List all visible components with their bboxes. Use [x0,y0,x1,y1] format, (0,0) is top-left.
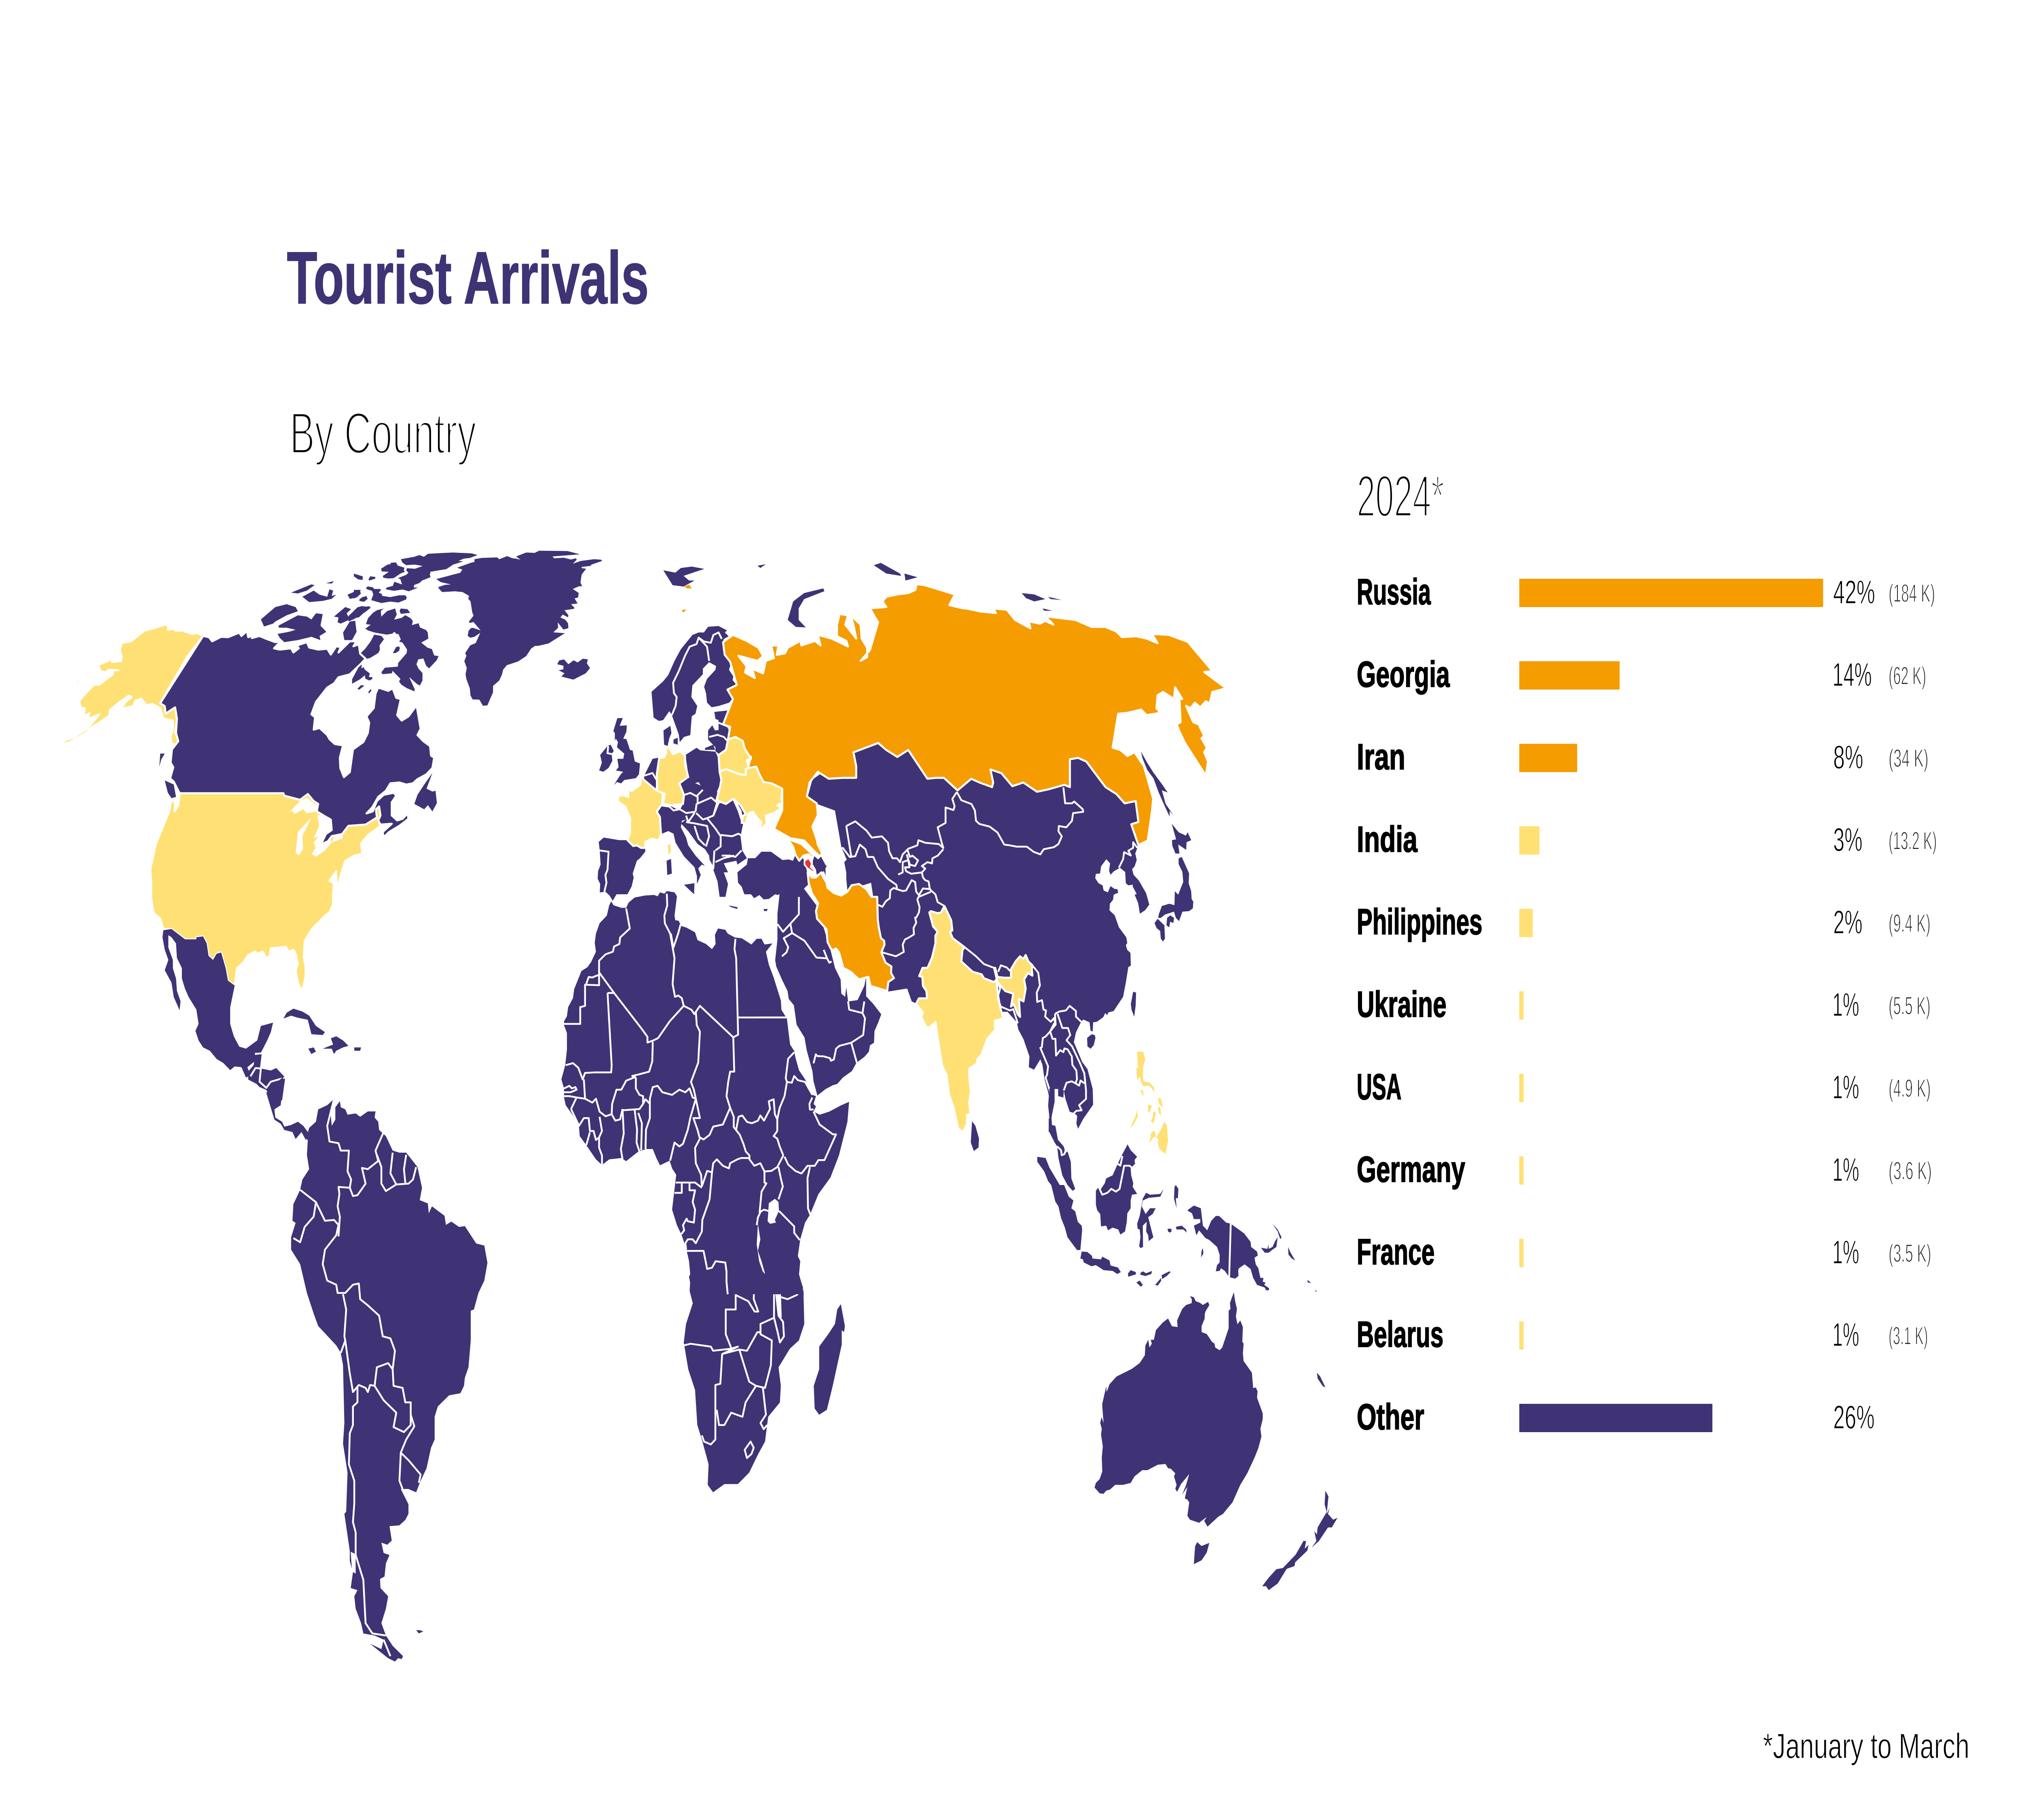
Malay Peninsula [1048,1088,1075,1191]
Ukraine [717,766,783,831]
Armenia [804,858,816,878]
row: Iran: Iran [1357,736,1405,777]
Arctic and Pacific islands [277,613,326,642]
map: Africa north [561,891,849,1294]
Caribbean islands [283,1009,325,1035]
Alaska [51,624,203,749]
row: Belarus [1357,1314,1928,1354]
row: France: 1% [1832,1234,1859,1271]
Iberia [598,838,645,901]
row: Philippines: Philippines [1357,901,1483,942]
row: Germany: (3.6 K) [1889,1157,1932,1185]
southern Africa [684,1274,804,1492]
row: Germany: 1% [1832,1151,1859,1188]
Mongolia border [957,787,1083,855]
row: Georgia: Georgia [1357,654,1450,694]
map: South America and southern Africa [266,1076,845,1661]
Central Asia borders [846,792,957,862]
row: India: (13.2 K) [1889,827,1937,855]
South America [291,1099,487,1661]
row: Russia: 42% [1833,574,1875,611]
row: Belarus: (3.1 K) [1889,1322,1928,1350]
Italy [657,804,705,884]
Indonesia [1037,1157,1082,1250]
row: Russia [1357,571,1935,612]
Arctic islands [663,567,704,586]
row: France: (3.5 K) [1889,1239,1931,1267]
Belarus [719,737,751,775]
row: Iran [1357,736,1929,777]
row: Germany [1357,1149,1932,1189]
Philippines [1136,1052,1155,1092]
Caspian Sea [812,810,847,896]
South Korea [1133,880,1149,914]
chart heading: 2024* [1357,463,1444,529]
map: North America [51,581,437,1102]
row: India [1357,819,1937,859]
row: Germany: Germany [1357,1149,1465,1189]
map: Greenland, Iceland and eastern Arctic [349,551,602,706]
New Zealand [1262,1541,1309,1590]
row: Belarus: Belarus [1357,1314,1443,1354]
Sakhalin and Japan [1141,751,1174,817]
Sri Lanka [971,1121,979,1151]
map: Central Asia, Middle East and China base [775,739,1074,1096]
subtitle: By Country [290,400,476,466]
Mexico [163,929,273,1077]
row: Other [1357,1396,1875,1437]
France [618,777,663,848]
Germany [657,747,688,805]
row: Ukraine: (5.5 K) [1889,992,1931,1020]
Central Europe and Balkans [680,777,747,897]
Canada [160,631,434,851]
Middle East borders [777,897,799,932]
Iran [808,872,894,991]
map: Southeast Asia and Oceania [971,1052,1337,1590]
row: Georgia: (62 K) [1889,662,1926,690]
map: Europe base [598,626,809,911]
Australia [1095,1292,1263,1527]
Baltics [708,710,732,754]
Turkey [738,852,809,899]
New Guinea [1187,1206,1269,1290]
Madagascar [814,1304,845,1415]
bar chart [1357,463,1937,1437]
row: Belarus: 1% [1832,1316,1859,1353]
Poland [685,748,722,790]
map: Caspian, Iran, India and Central Asia borders [758,787,1083,1132]
row: Georgia [1357,654,1926,694]
row: USA: 1% [1832,1069,1859,1106]
row: France: France [1357,1231,1435,1272]
world map [51,551,1337,1661]
row: Philippines: 2% [1833,904,1863,941]
row: USA: USA [1357,1066,1402,1107]
row: France [1357,1231,1931,1272]
India [916,906,1003,1132]
Benelux [644,758,659,789]
row: USA: (4.9 K) [1889,1074,1931,1102]
footnote: *January to March [1763,1727,1969,1766]
row: Other: 26% [1833,1399,1875,1436]
map: East Asia [1007,751,1193,1133]
row: Ukraine: Ukraine [1357,984,1447,1024]
USA [150,793,381,991]
Hainan and Taiwan [1087,1034,1096,1049]
Azerbaijan [812,854,829,881]
row: India: 3% [1833,821,1863,858]
UK and Ireland [613,718,640,785]
row: Philippines [1357,901,1931,942]
row: USA [1357,1066,1931,1107]
row: Philippines: (9.4 K) [1889,909,1931,937]
row: Georgia: 14% [1832,656,1872,693]
row: India: India [1357,819,1418,859]
Scandinavia and Finland [651,626,738,742]
title: Tourist Arrivals [287,237,649,320]
row: Other: Other [1357,1396,1424,1437]
row: Russia: Russia [1357,571,1431,612]
Central America north [248,1053,285,1102]
row: Russia: (184 K) [1889,579,1935,607]
Central America south [266,1076,308,1140]
Tasmania [1194,1542,1209,1564]
row: Iran: (34 K) [1889,744,1929,772]
row: Ukraine [1357,984,1931,1024]
row: Iran: 8% [1833,739,1863,776]
Denmark [664,726,671,746]
row: Ukraine: 1% [1832,986,1859,1023]
Georgia [788,839,815,861]
Pacific islands [1261,1237,1277,1253]
map: Eastern Europe highlighted countries [618,737,894,991]
map: Russia [663,563,1226,857]
